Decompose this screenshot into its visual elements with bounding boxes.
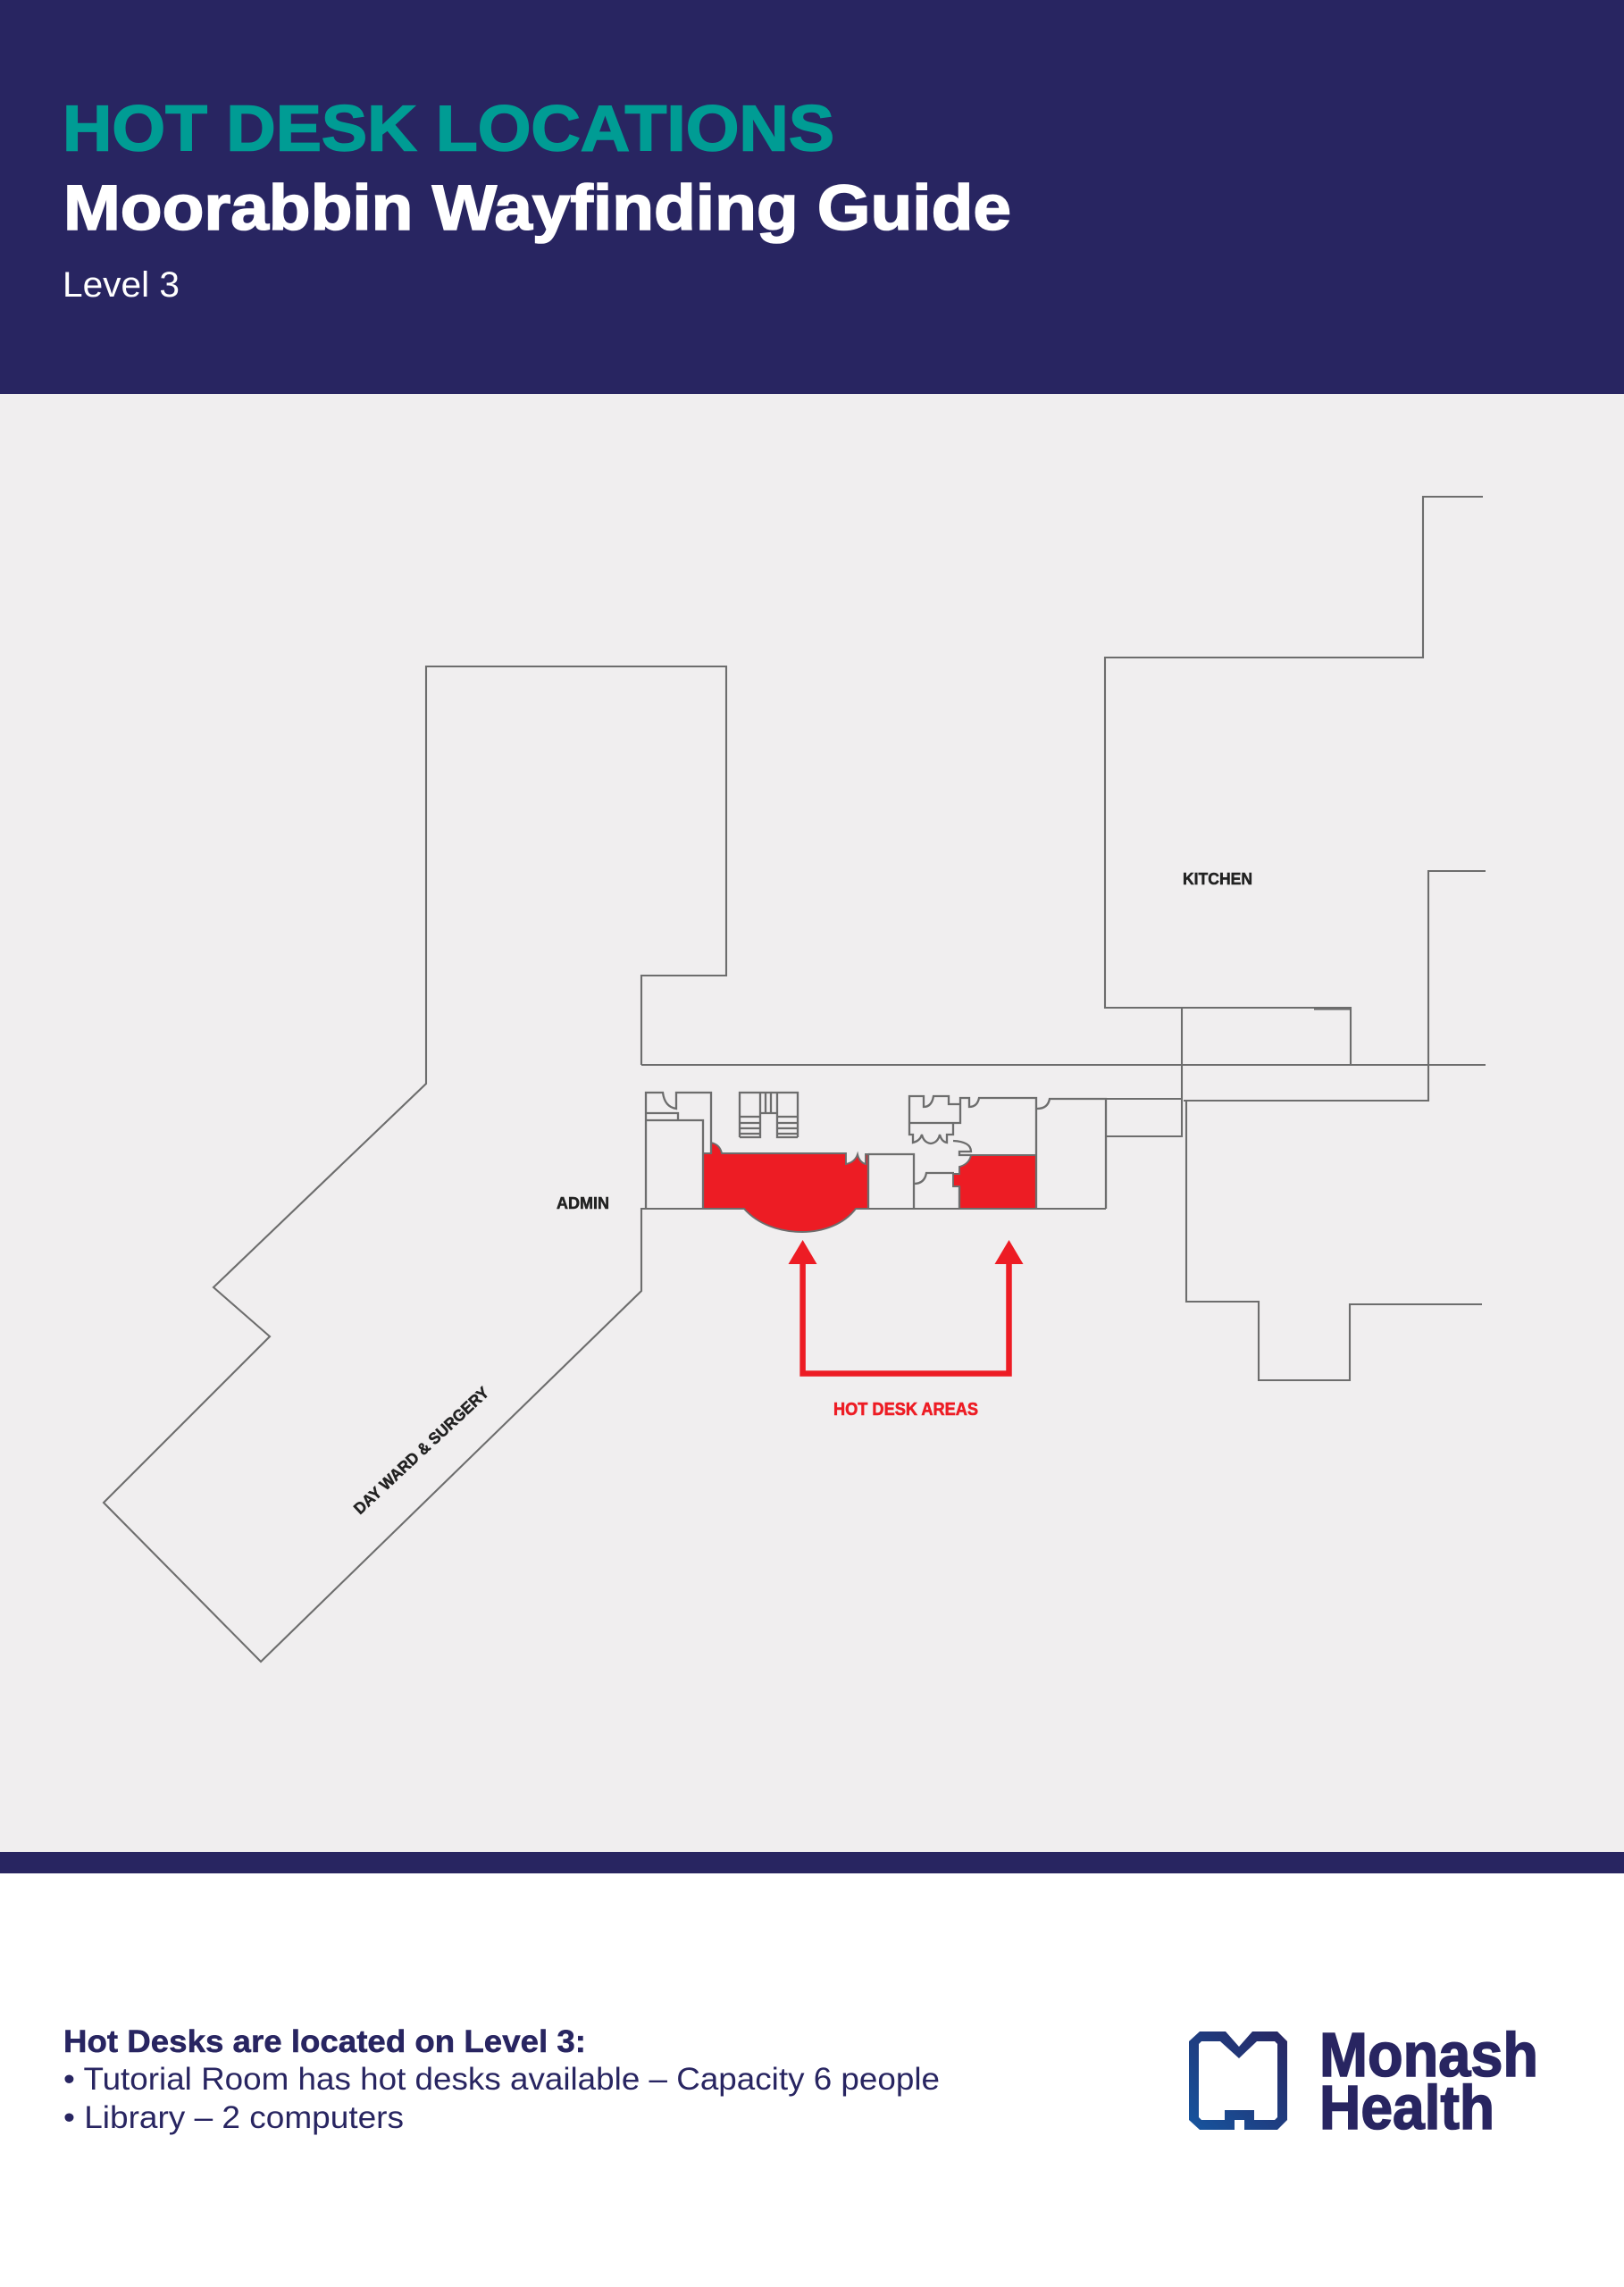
logo: monash health [1189, 2020, 1538, 2142]
building outline: day ward and admin wing [104, 666, 1106, 1662]
wall stub: kitchen annex [1314, 1007, 1351, 1010]
building outline: service block [1106, 1008, 1182, 1136]
label: hot desk areas: HOT DESK AREAS [833, 1400, 978, 1420]
building outline: east wing [1184, 871, 1486, 1101]
corridor line [641, 1064, 1486, 1066]
hot desk area: tutorial room [703, 1143, 868, 1232]
label: day ward and surgery: DAY WARD & SURGERY [350, 1384, 492, 1518]
building outline: south east wing [1186, 1101, 1482, 1380]
building outline: kitchen wing [1105, 497, 1483, 1065]
stairwell [740, 1093, 798, 1137]
logo wordmark: Health [1319, 2073, 1494, 2142]
rooms: east cluster [909, 1096, 1106, 1209]
text block: hot desk details [63, 2024, 940, 2135]
text block: hot desk details: • Library – 2 computers [63, 2100, 404, 2135]
logo wordmark [1319, 2020, 1538, 2142]
title: hot desk locations: HOT DESK LOCATIONS [63, 93, 834, 164]
logo wordmark: Monash [1319, 2020, 1538, 2090]
icon: monash health mark [1189, 2031, 1287, 2130]
level label: Level 3 [63, 265, 180, 305]
rooms: central room [868, 1154, 914, 1209]
header banner [0, 0, 1624, 394]
hot desk area: library [953, 1155, 1036, 1209]
arrow: hot desk areas [788, 1240, 1024, 1374]
rooms: west cluster [646, 1093, 711, 1209]
label: kitchen: KITCHEN [1183, 870, 1252, 888]
text block: hot desk details: • Tutorial Room has hot desks available – Capacity 6 people [63, 2062, 940, 2097]
label: admin: ADMIN [557, 1194, 609, 1212]
panel: floor map [0, 394, 1624, 1852]
subtitle: wayfinding guide: Moorabbin Wayfinding Guide [63, 173, 1011, 244]
text block: hot desk details: Hot Desks are located on Level 3: [63, 2024, 586, 2059]
divider band [0, 1852, 1624, 1873]
